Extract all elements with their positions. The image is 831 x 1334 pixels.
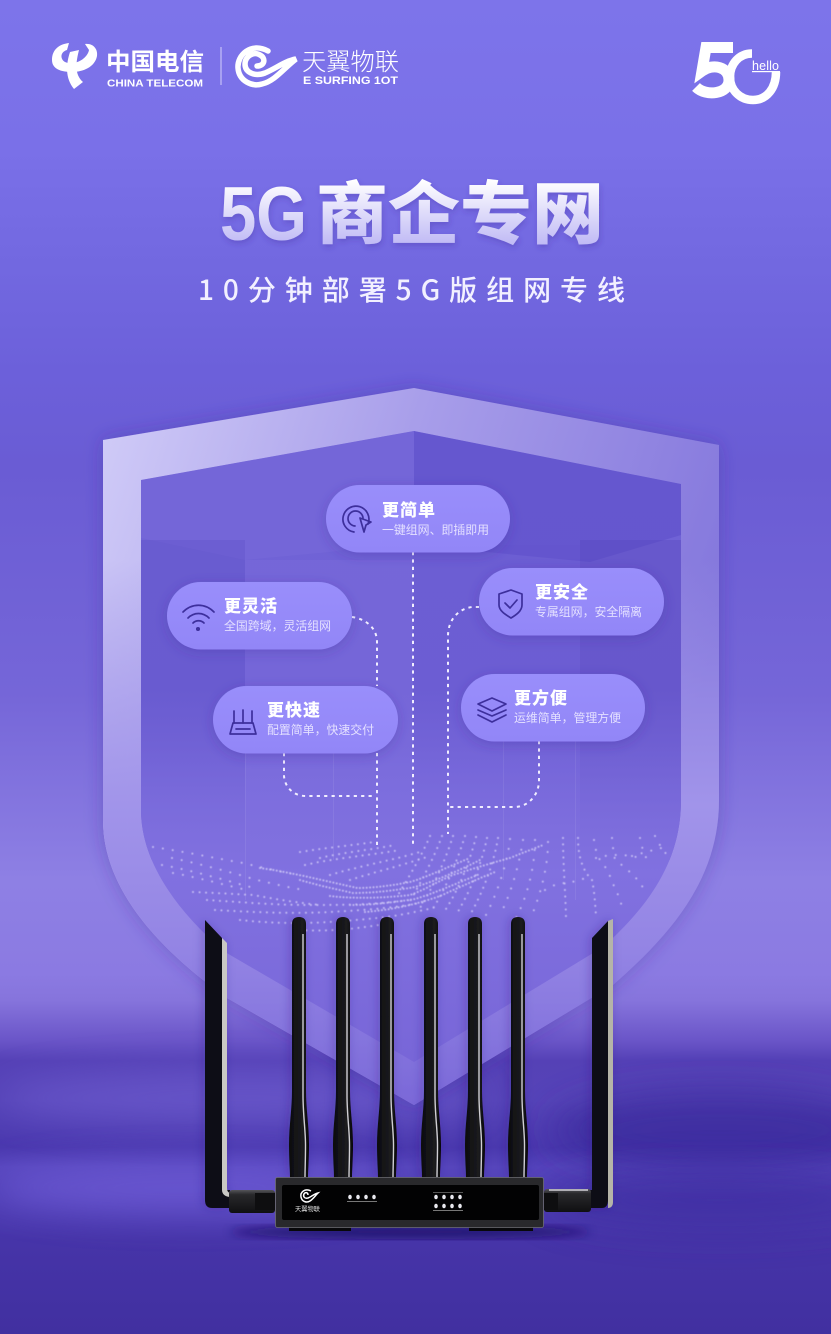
icon: router	[230, 710, 256, 734]
panel: 更安全	[479, 568, 664, 636]
router body	[276, 1178, 544, 1228]
subtitle: 10分钟部署5G版组网专线	[198, 269, 625, 309]
text: 更简单	[382, 496, 489, 538]
text: E Surfing IoT wordmark: E SURFING 1OT	[303, 75, 398, 87]
logo: 5G hello: hello	[752, 59, 779, 73]
panel: 更快速	[213, 686, 398, 754]
icon: shield check	[499, 590, 522, 618]
text: 更方便	[514, 684, 621, 726]
connector: simple to router	[412, 552, 414, 846]
icon: target cursor	[343, 506, 371, 532]
connector: right hinge	[544, 1189, 591, 1212]
text: 更灵活	[224, 592, 331, 634]
dashed connectors	[284, 552, 539, 846]
antenna: inner 4	[421, 917, 441, 1178]
router	[205, 917, 613, 1239]
text: 更快速: 更快速	[267, 696, 321, 721]
logo: 5G hello	[696, 48, 780, 100]
panel: 更灵活	[167, 582, 352, 650]
connector: convenient to router	[450, 741, 539, 807]
antenna: right outer	[585, 919, 613, 1208]
icon: E Surfing swirl	[238, 48, 296, 85]
router front panel	[282, 1185, 539, 1220]
antenna: inner 6	[508, 917, 528, 1178]
router shadow	[230, 1225, 590, 1239]
panel: 更简单	[326, 485, 510, 552]
antenna: inner 3	[377, 917, 397, 1178]
text: 更灵活: 更灵活	[224, 592, 278, 617]
panel: 更方便	[461, 674, 645, 742]
antenna: inner 2	[333, 917, 353, 1178]
icon: wifi	[183, 605, 214, 630]
logo: China Telecom and E Surfing IoT	[52, 42, 399, 90]
text: 更安全	[535, 578, 642, 620]
text: 更方便: 更方便	[514, 684, 568, 709]
router status LEDs	[347, 1192, 463, 1211]
text: China Telecom wordmark: 中国电信	[106, 42, 204, 77]
antenna: inner 5	[465, 917, 485, 1178]
panel: shield	[103, 388, 719, 1105]
antenna: inner 1	[289, 917, 309, 1178]
text: 更快速	[267, 696, 374, 738]
text: E Surfing IoT wordmark: 天翼物联	[302, 42, 399, 77]
icon: China Telecom emblem	[52, 43, 97, 89]
text: 更方便: 运维简单，管理方便	[514, 709, 621, 726]
icon: router logo	[301, 1190, 318, 1202]
connector: left hinge	[229, 1190, 275, 1213]
text: China Telecom wordmark: CHINA TELECOM	[107, 78, 203, 90]
connector: flexible to router	[352, 617, 377, 846]
title: 商企专网	[316, 159, 604, 258]
dotted network wave	[153, 836, 670, 931]
text: 更快速: 配置简单，快速交付	[267, 721, 374, 738]
text: 更灵活: 全国跨域，灵活组网	[224, 617, 331, 634]
shield outer frame	[103, 388, 719, 1105]
title: 5G	[220, 172, 307, 257]
text: 更简单: 更简单	[382, 496, 436, 521]
antenna: left outer	[205, 920, 231, 1208]
connector: secure to router	[448, 607, 479, 834]
shield inner panel	[141, 431, 681, 1062]
router feet	[289, 1226, 533, 1231]
text: 更安全: 专属组网，安全隔离	[535, 603, 642, 620]
icon: layers	[478, 698, 506, 722]
text: 更简单: 一键组网、即插即用	[382, 521, 489, 538]
connector: fast to router	[284, 753, 374, 796]
text: 更安全: 更安全	[535, 578, 589, 603]
text: router logo label: 天翼物联	[295, 1203, 320, 1213]
